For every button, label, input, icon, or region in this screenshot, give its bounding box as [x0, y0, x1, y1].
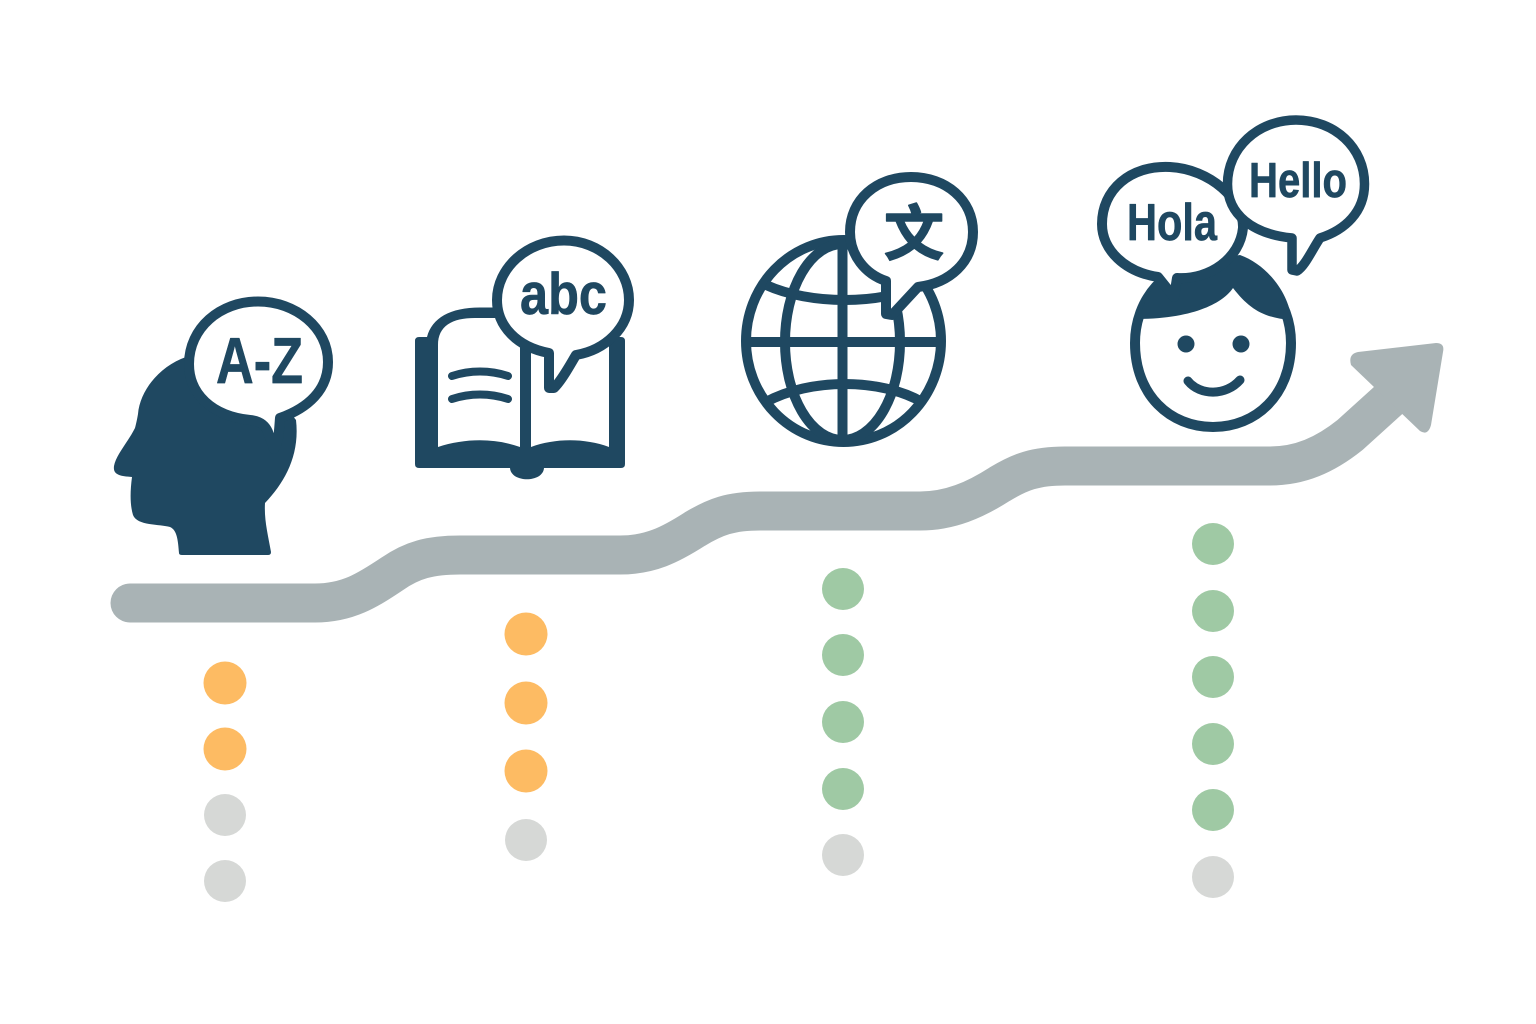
level 1 dots: 2 of 4 — [204, 662, 246, 902]
icon: head with A-Z speech bubble — [114, 302, 328, 555]
A-Z label: A-Z — [216, 324, 303, 397]
rising progress arrow — [130, 343, 1443, 603]
level 2 dots: 3 of 4 — [504, 612, 548, 861]
文 label: 文 — [884, 201, 944, 268]
Hello label: Hello — [1249, 154, 1347, 208]
icon: smiling face with Hola and Hello speech bubbles — [1102, 120, 1364, 427]
icon: globe with translation speech bubble — [746, 177, 973, 442]
level 4 dots: 5 of 6 — [1192, 523, 1234, 898]
Hola label: Hola — [1127, 194, 1218, 252]
level 3 dots: 4 of 5 — [822, 568, 864, 876]
icon: open book with abc speech bubble — [415, 240, 629, 479]
abc label: abc — [520, 262, 607, 327]
